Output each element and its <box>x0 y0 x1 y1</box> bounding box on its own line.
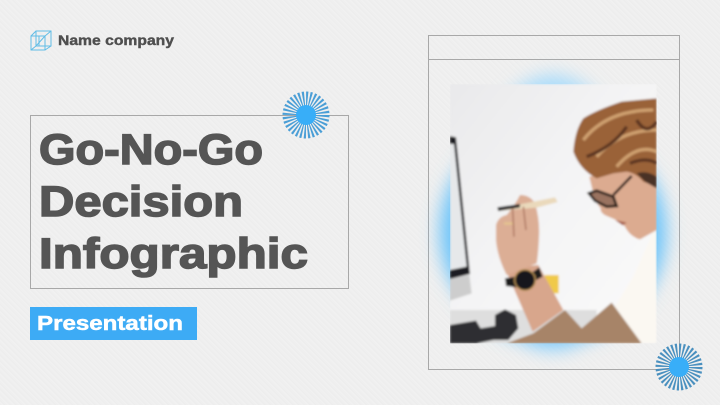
watch <box>505 267 543 287</box>
hair <box>573 98 657 187</box>
camera on desk <box>450 309 518 343</box>
white shirt <box>628 318 656 342</box>
sweater <box>507 303 642 343</box>
subtitle badge: Presentation <box>37 313 183 335</box>
title <box>39 126 308 278</box>
glasses <box>613 176 632 195</box>
forearm <box>505 265 563 332</box>
monitor <box>450 136 470 279</box>
starburst: title <box>290 99 322 131</box>
pen <box>497 197 558 211</box>
title: Go-No-Go <box>39 126 263 174</box>
desk <box>450 310 597 343</box>
title: Decision <box>39 178 243 226</box>
face <box>589 170 657 239</box>
fingers shade <box>513 207 526 237</box>
company name: Name company <box>58 32 174 48</box>
yellow item <box>545 275 559 293</box>
photo: woman with pen <box>450 84 657 343</box>
starburst: photo corner <box>663 351 695 383</box>
ring <box>504 222 514 225</box>
hand <box>496 195 539 275</box>
title: Infographic <box>39 230 308 278</box>
subtitle badge <box>30 307 197 340</box>
logo icon <box>31 31 51 50</box>
title frame <box>30 116 348 288</box>
photo frame <box>428 36 680 370</box>
photo glow <box>440 75 666 351</box>
